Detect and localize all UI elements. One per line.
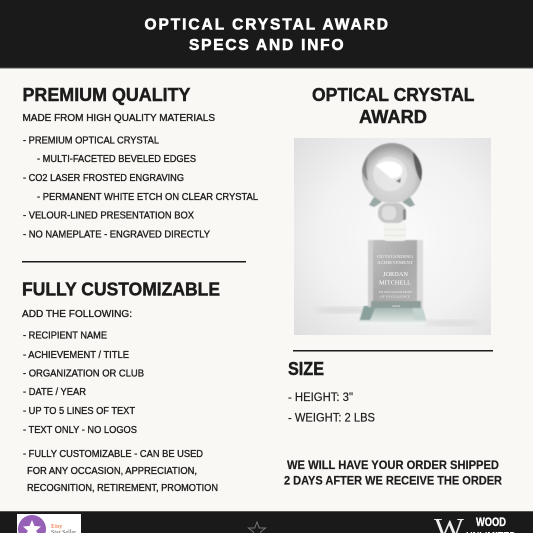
crystal block [368,240,423,308]
text block: materials list [22,112,258,240]
engraved text [377,254,414,308]
text block: materials list: - CO2 LASER FROSTED ENGRAVING [23,172,184,184]
text block: customization options: - RECIPIENT NAME [23,330,107,342]
text block: materials list: - PREMIUM OPTICAL CRYSTAL [23,134,159,146]
engraved text: OUTSTANDING [377,254,413,259]
callout: shipping note [284,460,503,488]
panel: size [288,358,375,425]
logo: wood unlimited [434,514,516,533]
footer band [0,511,533,533]
text block: customization options: RECOGNITION, RETIREMENT, PROMOTION [27,482,218,494]
frosted stem [378,203,406,241]
engraved text: IN RECOGNITION [379,290,413,294]
icon: star [248,522,266,533]
crystal sphere [362,143,422,207]
heading: product name: OPTICAL CRYSTAL [312,84,474,105]
glass base [358,306,427,325]
callout: shipping note: 2 DAYS AFTER WE RECEIVE THE ORDER [284,476,503,488]
header band: SPECS AND INFO [189,37,344,54]
heading: premium quality: PREMIUM QUALITY [22,84,191,105]
text block: customization options: FOR ANY OCCASION, APPRECIATION, [27,465,197,477]
badge: etsy star seller [17,514,81,533]
badge: etsy star seller: Etsy [51,524,62,530]
text block: customization options [22,308,218,494]
text block: materials list: - VELOUR-LINED PRESENTATION BOX [23,210,194,222]
text block: customization options: - ACHIEVEMENT / TITLE [23,349,129,361]
heading: product name: AWARD [359,106,427,127]
header band: OPTICAL CRYSTAL AWARD [144,16,388,34]
callout: shipping note: WE WILL HAVE YOUR ORDER SHIPPED [287,460,499,472]
engraved text: MITCHELL [379,280,411,286]
heading: size: SIZE [288,358,324,379]
heading: product name [312,84,474,127]
engraved text: ACHIEVEMENT [377,260,414,265]
heading: fully customizable: FULLY CUSTOMIZABLE [22,278,220,300]
text block: materials list: - PERMANENT WHITE ETCH ON CLEAR CRYSTAL [37,191,258,203]
product photo: crystal award [294,138,491,335]
engraved text: 2026 [392,304,401,308]
text block: dimensions: - HEIGHT: 3" [288,392,353,404]
text block: materials list: - MULTI-FACETED BEVELED EDGES [37,153,196,165]
text block: customization options: - UP TO 5 LINES OF TEXT [23,405,136,417]
text block: customization options: ADD THE FOLLOWING: [22,308,132,320]
text block: customization options: - ORGANIZATION OR CLUB [23,368,144,380]
panel: fully customizable [22,278,220,494]
text block: customization options: - FULLY CUSTOMIZABLE - CAN BE USED [23,448,203,460]
engraved text: JORDAN [383,271,408,278]
text block: dimensions [288,392,375,425]
text block: customization options: - DATE / YEAR [23,386,86,398]
header band [0,0,533,68]
text block: customization options: - TEXT ONLY - NO LOGOS [23,424,137,436]
text block: materials list: MADE FROM HIGH QUALITY MATERIALS [22,112,215,124]
text block: materials list: - NO NAMEPLATE - ENGRAVED DIRECTLY [23,228,210,240]
panel: premium quality [22,84,258,240]
logo: wood unlimited: WOOD [476,517,506,529]
text block: dimensions: - WEIGHT: 2 LBS [288,413,375,425]
engraved text: OF EXCELLENCE [380,294,410,298]
